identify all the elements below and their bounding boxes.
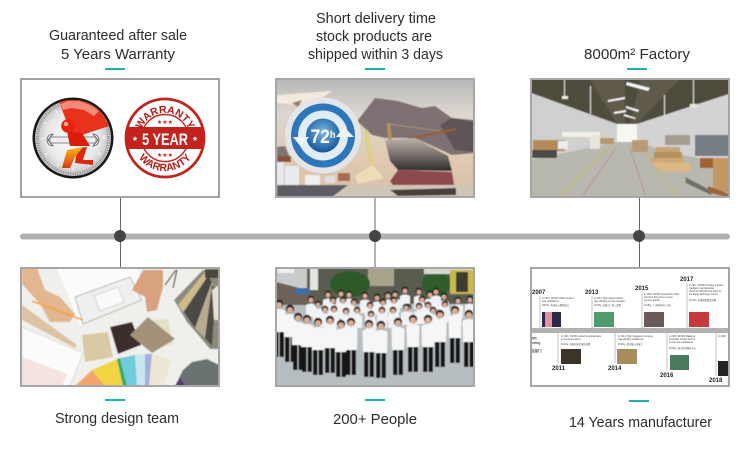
lower entries [531, 333, 729, 384]
connector: delivery to people [374, 198, 376, 267]
icon: 72h globe badge: h [330, 130, 336, 141]
lower entries: 2011年, 木质开始全球化进程 [561, 342, 591, 346]
lower entries: in overseas market. [561, 338, 581, 341]
lower entries: In 2016, WOOD Malaysia [669, 336, 696, 338]
upper entries: 2013 [585, 290, 599, 296]
caption: people: 200+ People [333, 411, 417, 428]
boom [386, 122, 392, 140]
lower entries: 2014 [608, 366, 622, 372]
laptop [22, 327, 83, 386]
lower entries: In 2014, High Singapore Company [618, 335, 654, 338]
panel: factory photo [531, 79, 729, 198]
upper entries: 2013年, 高速工厂投入使用 [594, 303, 622, 307]
upper entries: intelligent manufacturing [689, 287, 715, 290]
icon: 5 year warranty stamp: ★ [132, 135, 138, 143]
icon: 72h globe badge: 72 [310, 127, 332, 148]
upper entries: was officially put into operation. [594, 300, 626, 303]
upper entries: In 2007, WOOD Office furniture [542, 297, 575, 300]
lower entries: 2016 [660, 373, 674, 379]
side walls [531, 93, 617, 160]
caption: design team: Strong design team [55, 410, 179, 427]
upper entries: opened grandly. [644, 299, 661, 302]
panel: design team photo [21, 268, 219, 386]
upper entries: 2015年, 广州体验中心开业 [644, 303, 672, 307]
lower entries: 2014年, 新加坡公司成立 [618, 342, 643, 346]
upper entries [532, 277, 723, 328]
accent rule: warranty [105, 68, 125, 70]
heading: delivery: Short delivery time [316, 10, 436, 27]
upper entries: the Equity Exchange Center. [689, 293, 718, 296]
lower entries: 2011 [552, 366, 566, 372]
quay and water [332, 185, 474, 197]
right hand [132, 270, 163, 312]
front rows of staff [272, 300, 476, 378]
upper entries: In 2015, WOOD Guangzhou Office [644, 294, 680, 296]
icon: 5 year warranty stamp: WARRANTY [140, 153, 190, 172]
timeline node 1 [114, 230, 126, 242]
accent rule: manufacturer [629, 400, 649, 402]
accent rule: delivery [365, 68, 385, 70]
upper entries: 2007年, 木质办公家具成立 [542, 303, 570, 307]
lower entries: 当部门 [531, 348, 542, 353]
heading: warranty [49, 27, 187, 63]
icon: 5 year warranty stamp: WARRANTY [135, 106, 195, 128]
connector: warranty to design team [120, 198, 122, 267]
plane [277, 91, 332, 105]
lower entries: 2016年, 澳大利亚服务中心 [669, 346, 697, 350]
icon: 5 year warranty stamp: 5 YEAR [142, 130, 188, 149]
lower entries: In 2011, WOOD started its globalization [561, 335, 602, 338]
floor [540, 142, 656, 158]
skylights [626, 82, 650, 91]
timeline bar [20, 234, 730, 240]
right machines [695, 135, 729, 156]
heading: warranty: Guaranteed after sale [49, 27, 187, 44]
upper entries: 2017年, 全球智能制造品牌 [689, 298, 717, 302]
upper entries: In 2017, WOOD became a global [689, 285, 723, 287]
left hand [22, 268, 75, 322]
accent rule: factory [627, 68, 647, 70]
colour fan [75, 370, 105, 386]
lower entries: Australian market Service [669, 338, 696, 341]
upper entries: 2017 [680, 277, 694, 283]
timeline node 3 [633, 230, 645, 242]
lower entries: Center was established. [669, 341, 694, 344]
heading: factory: 8000m² Factory [584, 46, 690, 63]
yellow crane [364, 130, 374, 166]
roof [531, 79, 729, 124]
lower entries: 2018 [709, 378, 723, 384]
upper entries: 2007 [532, 290, 546, 296]
swatch fan [174, 270, 219, 349]
rulers [22, 305, 77, 348]
lamps [564, 80, 565, 96]
icon: 5 year warranty stamp: ★★★ [157, 152, 173, 159]
panel: delivery photo [276, 79, 474, 197]
lower entries: was officially established. [618, 338, 644, 341]
icon: 72h globe badge [285, 98, 361, 174]
back wall [617, 124, 637, 145]
lower entries: ays [531, 336, 537, 340]
icon: 5 year warranty stamp: ★ [192, 135, 198, 143]
heading: delivery [308, 10, 443, 63]
caption: manufacturer: 14 Years manufacturer [569, 414, 712, 431]
accent rule: design team [105, 399, 125, 401]
lower entries: In 2018 [718, 336, 726, 338]
back rows of staff [306, 287, 475, 332]
heading: warranty: 5 Years Warranty [61, 46, 175, 63]
lower entries: nving [531, 341, 540, 345]
upper entries: Furniture Experience Center [644, 296, 673, 299]
upper entries: was established. [542, 300, 559, 303]
heading: delivery: shipped within 3 days [308, 46, 443, 63]
heading: delivery: stock products are [316, 28, 432, 45]
panel: company history timeline [531, 268, 729, 386]
panel: warranty [20, 78, 220, 198]
centre piles [632, 140, 648, 152]
upper entries: 2015 [635, 286, 649, 292]
timeline node 2 [369, 230, 381, 242]
left benches [562, 132, 600, 137]
accent rule: people [365, 399, 385, 401]
ship hull [385, 138, 452, 171]
material samples [82, 332, 113, 362]
icon: 5 year warranty stamp: ★★★ [157, 119, 173, 126]
connector: factory to manufacturer [638, 198, 640, 267]
floor plan sheet [57, 268, 146, 325]
carpet samples [175, 359, 219, 386]
upper entries: In 2013, High Speed Factory [594, 297, 624, 300]
icon: repair stopwatch [32, 98, 114, 178]
trucks [277, 156, 291, 162]
icon: 5 year warranty stamp [124, 98, 206, 178]
panel: team group photo [272, 268, 476, 386]
upper entries: brand and WOOD was listed on [689, 290, 722, 293]
